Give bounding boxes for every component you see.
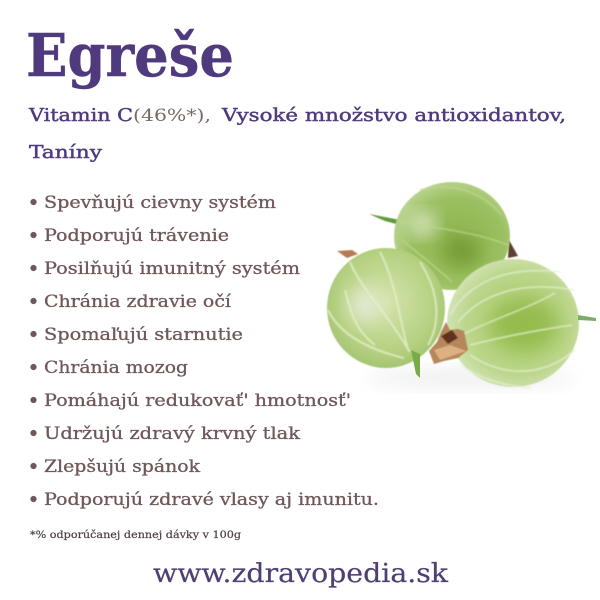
benefits list: Podporujú trávenie bbox=[44, 226, 229, 245]
benefits list: Spomaľujú starnutie bbox=[44, 325, 243, 344]
top gooseberry bbox=[394, 182, 510, 290]
benefits list: Pomáhajú redukovať' hmotnosť' bbox=[44, 391, 351, 410]
footnote: *% odporúčanej dennej dávky v 100g bbox=[30, 528, 241, 541]
benefits list: Spevňujú cievny systém bbox=[44, 193, 276, 212]
dried calyx bbox=[429, 322, 468, 364]
benefits list: Zlepšujú spánok bbox=[44, 457, 201, 476]
right gooseberry bbox=[447, 259, 579, 388]
website url: www.zdravopedia.sk bbox=[153, 559, 448, 589]
left stem bbox=[411, 350, 420, 378]
title: Egreše bbox=[26, 21, 234, 90]
back stem and calyx bbox=[337, 214, 518, 258]
gooseberries photo illustration bbox=[327, 182, 596, 388]
nutrient summary: (46%*), bbox=[133, 106, 211, 126]
nutrient summary: Taníny bbox=[29, 142, 103, 163]
benefits list: Udržujú zdravý krvný tlak bbox=[44, 424, 301, 443]
nutrient summary: Vitamin C bbox=[28, 105, 133, 126]
nutrient summary: Vysoké množstvo antioxidantov, bbox=[221, 105, 566, 126]
soft shadow bbox=[365, 368, 575, 388]
benefits list bbox=[30, 193, 379, 509]
benefits list: Chránia zdravie očí bbox=[44, 292, 232, 311]
benefits list: Posilňujú imunitný systém bbox=[44, 259, 300, 278]
right stem bbox=[578, 315, 596, 321]
nutrient summary bbox=[28, 105, 566, 163]
benefits list: Podporujú zdravé vlasy aj imunitu. bbox=[44, 490, 379, 509]
benefits list: Chránia mozog bbox=[44, 358, 188, 377]
left gooseberry bbox=[327, 248, 445, 368]
